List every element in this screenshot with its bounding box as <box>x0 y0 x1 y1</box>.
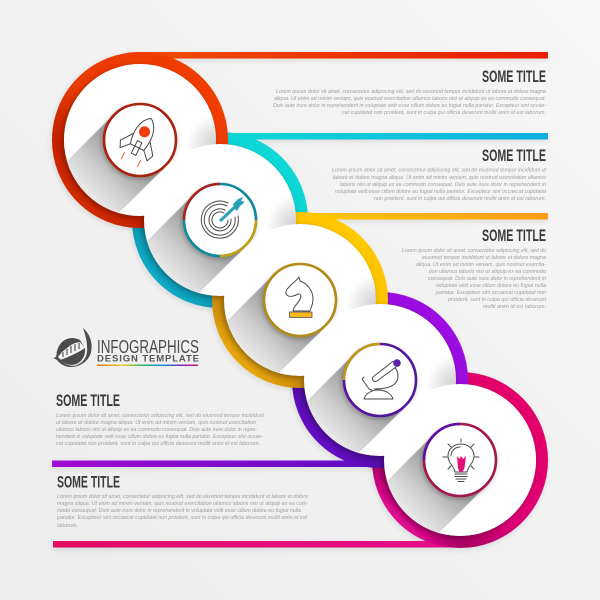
logo rainbow line <box>97 364 198 366</box>
body: step 4: cat cupidatat non proident, sunt in culpa qui officia deserunt mollit anim id est laborum. <box>56 441 260 447</box>
body: step 3: Lorem ipsum dolor sit amet, consectetur adipiscing elit, sed do <box>402 248 546 254</box>
logo: infographics design template <box>52 328 199 367</box>
body: step 3 <box>402 248 546 310</box>
body: step 4: ut labore et dolore magna aliqua. Ut enim ad minim veniam, quis nostrud exercitation <box>56 420 256 426</box>
body: step 3: mollit anim id est laborum. <box>483 304 546 310</box>
text block: step 3 <box>402 227 546 310</box>
body: step 1: Duis aute irure dolor in reprehenderit in voluptate velit esse cillum dolore eu fugiat nulla pariatur. Excepteur sint occae- <box>273 103 546 109</box>
body: step 2: Lorem ipsum dolor sit amet, consectetur adipiscing elit, sed do eiusmod tempor incididunt ut <box>332 168 546 174</box>
icon: microscope <box>362 359 401 399</box>
body: step 4 <box>56 413 264 447</box>
body: step 2: laboris nisi ut aliquip ex ea commodo consequat. Duis aute irure dolor in reprehenderit in <box>340 182 546 188</box>
body: step 5: magna aliqua. Ut enim ad minim veniam, quis nostrud exercitation ullamco laboris nisi ut aliquip ex ea com- <box>57 501 308 507</box>
ring and bar: step 1 red <box>58 52 548 222</box>
body: step 5: pariatur. Excepteur sint occaecat cupidatat non proident, sunt in culpa qui officia deserunt mollit anim id est <box>56 515 307 521</box>
heading: step 2: SOME TITLE <box>482 147 546 165</box>
body: step 3: proident, sunt in culpa qui officia deserunt <box>447 297 546 303</box>
ring and bar: step 5 pink <box>53 378 542 548</box>
text block: step 4 <box>56 392 264 447</box>
body: step 2: labore et dolore magna aliqua. Ut enim ad minim veniam, quis nostrud exercitation ullamco <box>333 175 546 181</box>
panel: disc 3 knight <box>224 224 376 376</box>
body: step 3: aliqua. Ut enim ad minim veniam, quis nostrud exercita- <box>416 262 546 268</box>
body: step 3: voluptate velit esse cillum dolore eu fugiat nulla <box>436 283 546 289</box>
heading: step 4: SOME TITLE <box>56 392 120 410</box>
ring and bar: step 3 gold <box>218 213 548 382</box>
disc shadows on rings <box>62 66 534 538</box>
panel: disc 2 target <box>144 144 296 296</box>
body: step 1: cat cupidatat non proident, sunt in culpa qui officia deserunt mollit anim id est laborum. <box>342 110 546 116</box>
icon: target with arrow <box>201 197 245 238</box>
body: step 2: voluptate velit esse cillum dolore eu fugiat nulla pariatur. Excepteur sint occaecat cupidatat <box>335 189 546 195</box>
text block: step 1 <box>273 68 546 116</box>
heading: step 1: SOME TITLE <box>482 68 546 86</box>
body: step 1: aliqua. Ut enim ad minim veniam, quis nostrud exercitation ullamco laboris nisi ut aliquip ex ea commodo consequat. <box>274 96 546 102</box>
body: step 5: modo consequat. Duis aute irure dolor in reprehenderit in voluptate velit esse cillum dolore eu fugiat nulla <box>57 508 301 514</box>
body: step 4: ullamco laboris nisi ut aliquip ex ea commodo consequat. Duis aute irure dolor in repre- <box>56 427 257 433</box>
text block: step 5 <box>56 474 308 529</box>
icon: rocket <box>113 110 167 171</box>
logo heading: INFOGRAPHICS <box>97 336 199 357</box>
body: step 3: tion ullamco laboris nisi ut aliquip ex ea commodo <box>429 269 546 275</box>
body: step 5: laborum. <box>57 523 78 529</box>
icon: chess knight <box>286 277 313 318</box>
panel: disc 4 microscope <box>304 304 456 456</box>
icon: logo emblem <box>52 328 92 367</box>
body: step 3: eiusmod tempor incididunt ut labore et dolore magna <box>422 255 546 261</box>
body: step 5: Lorem ipsum dolor sit amet, consectetur adipiscing elit, sed do eiusmod tempor incididunt ut labore et dolore <box>57 494 308 500</box>
icon: light bulb <box>443 439 479 482</box>
ring and bar: step 4 purple <box>52 298 462 467</box>
heading: step 5: SOME TITLE <box>57 474 120 492</box>
body: step 4: Lorem ipsum dolor sit amet, consectetur adipiscing elit, sed do eiusmod tempor incididunt <box>56 413 264 419</box>
body: step 4: henderit in voluptate velit esse cillum dolore eu fugiat nulla pariatur. Excepteur sint occae- <box>56 434 263 440</box>
ring and bar: step 2 teal <box>138 133 548 302</box>
panel: disc 5 bulb <box>384 384 536 536</box>
text block: step 2 <box>332 147 546 202</box>
heading: step 3: SOME TITLE <box>482 227 546 245</box>
body: step 5 <box>56 494 308 529</box>
body: step 2: non proident, sunt in culpa qui officia deserunt mollit anim id est laborum. <box>374 196 546 202</box>
logo subheading: DESIGN TEMPLATE <box>97 354 199 364</box>
body: step 1: Lorem ipsum dolor sit amet, consectetur adipiscing elit, sed do eiusmod tempor incididunt ut labore et dolore magna <box>276 89 546 95</box>
body: step 2 <box>332 168 546 202</box>
panel: disc 1 rocket <box>64 64 216 216</box>
body: step 1 <box>273 89 546 116</box>
body: step 3: consequat. Duis aute irure dolor in reprehenderit in <box>428 276 546 282</box>
body: step 3: pariatur. Excepteur sint occaecat cupidatat non <box>435 290 546 296</box>
